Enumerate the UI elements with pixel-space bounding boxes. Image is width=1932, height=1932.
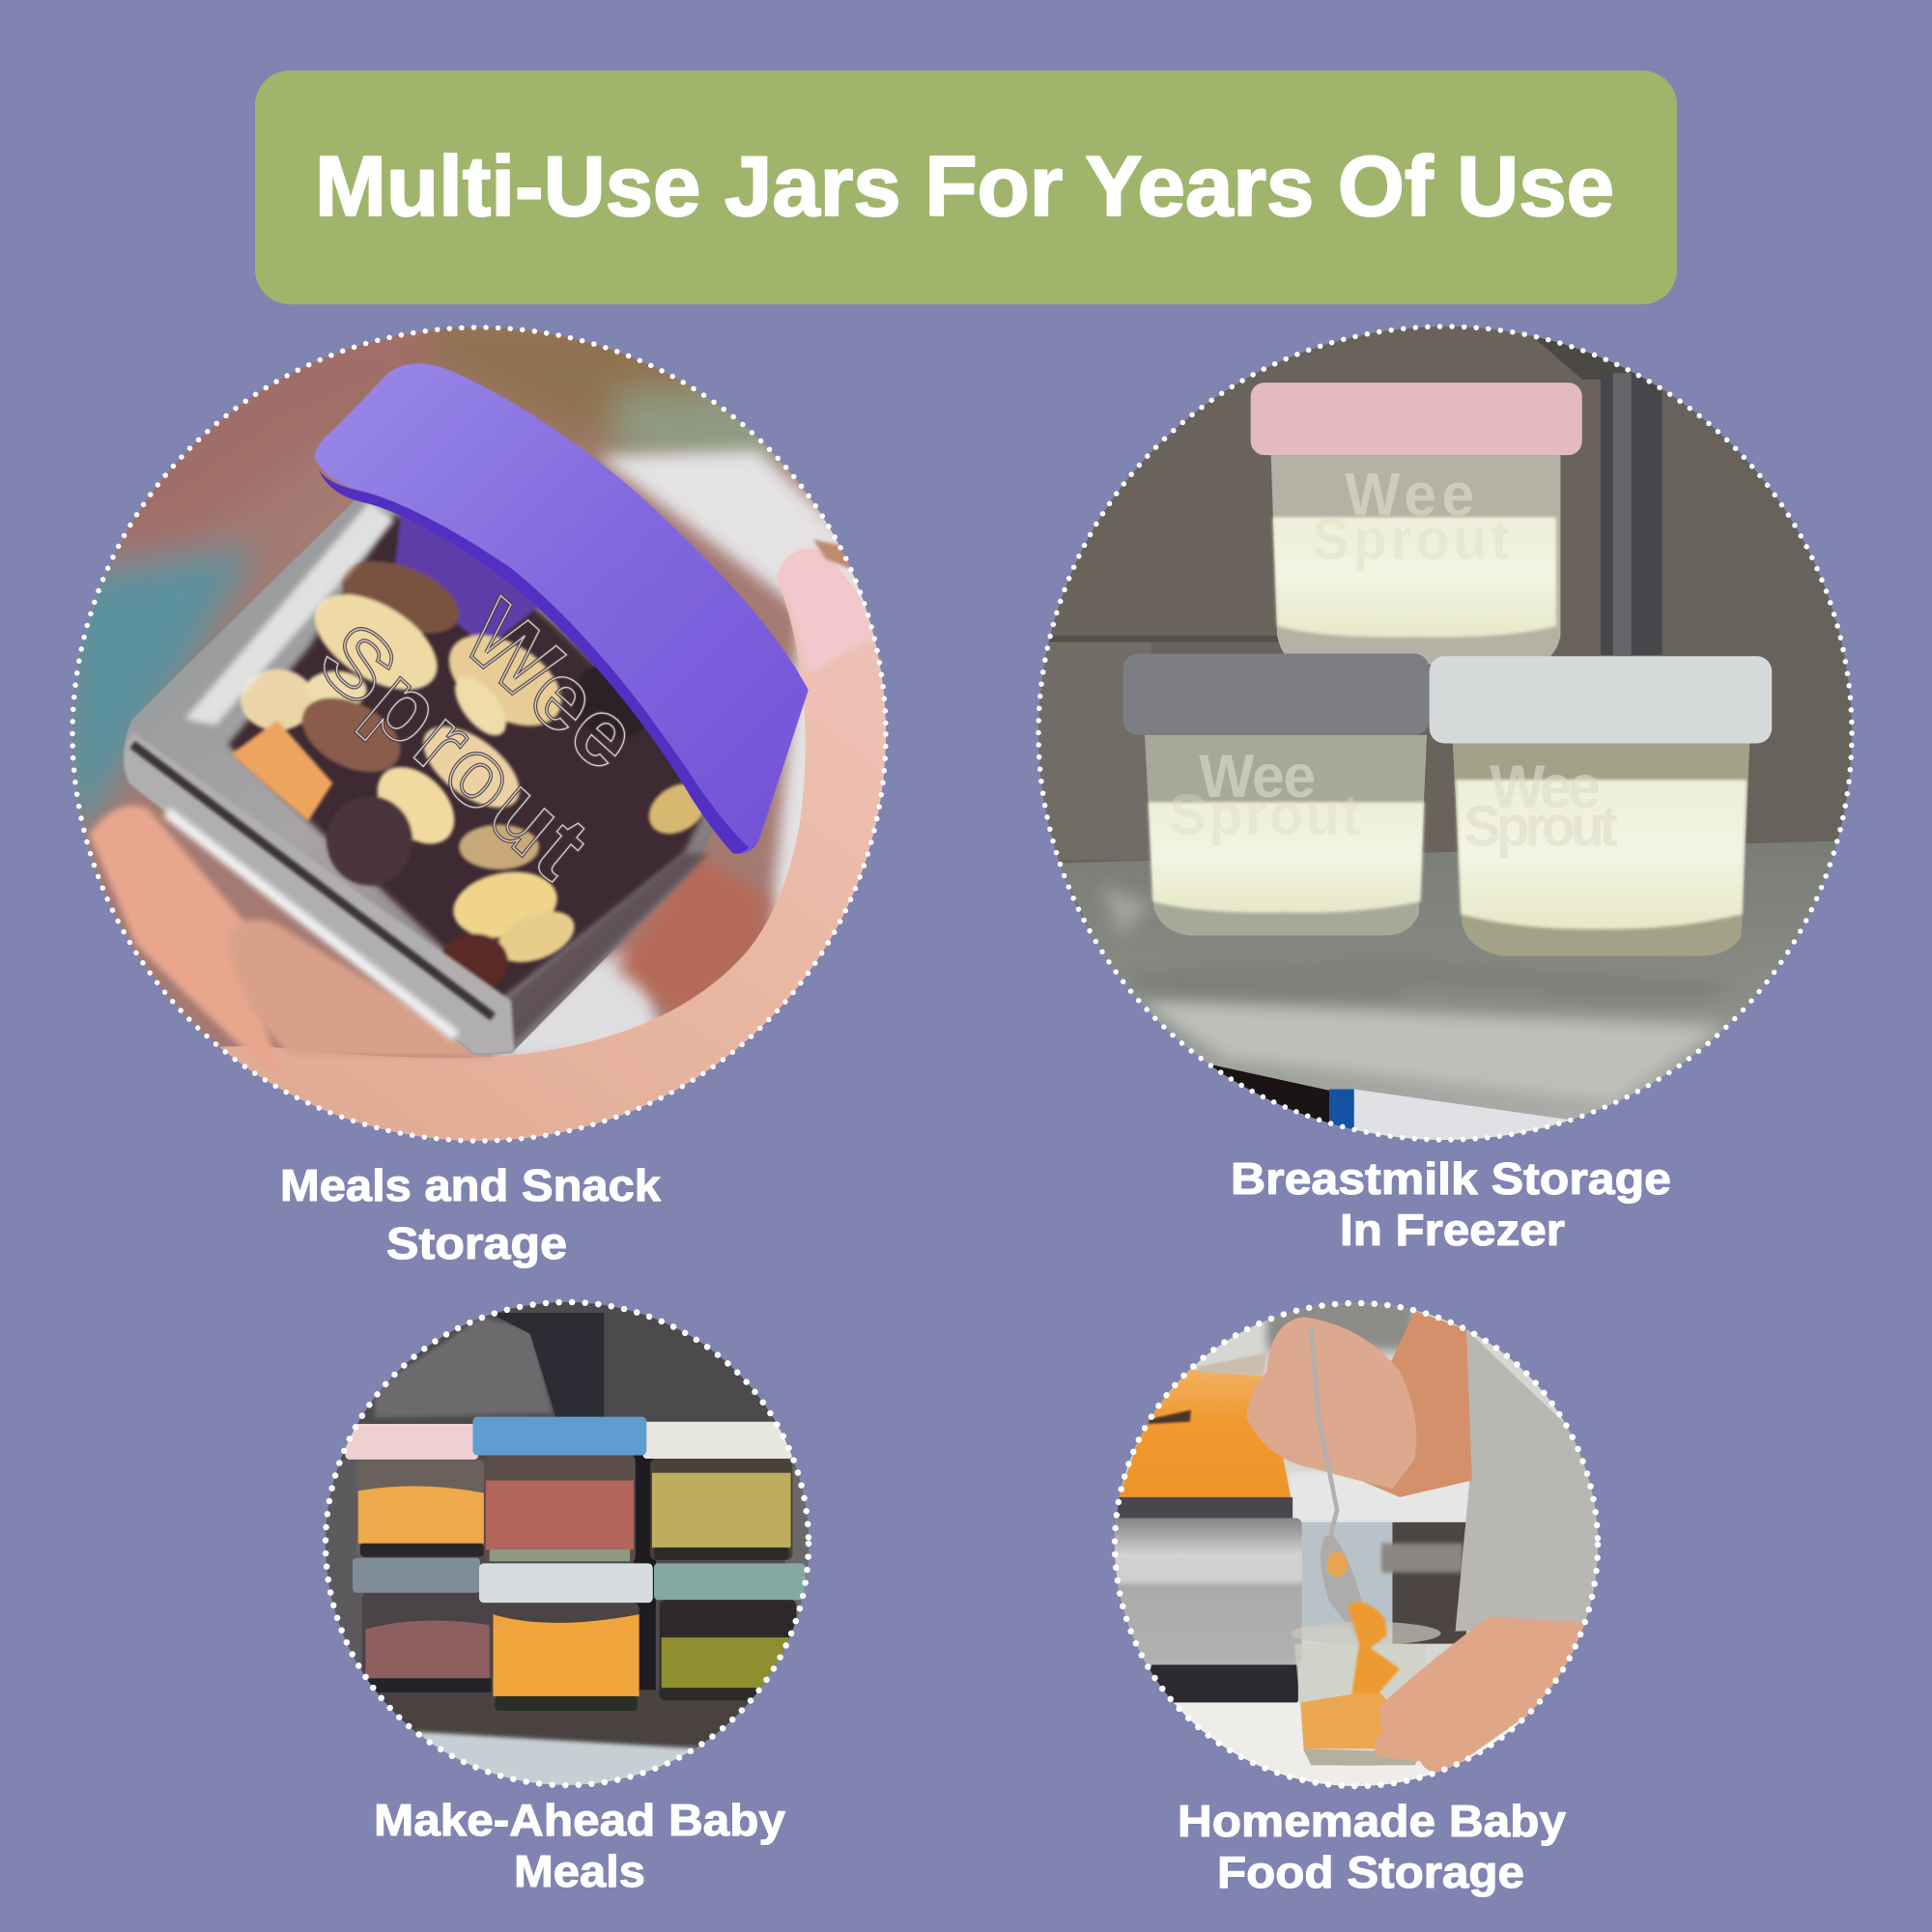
sweater bbox=[1456, 1329, 1606, 1632]
upper hand bbox=[1246, 1317, 1416, 1489]
dotted ring bbox=[1038, 327, 1852, 1140]
caption: In Freezer bbox=[1340, 1205, 1565, 1255]
fingertip bbox=[778, 549, 875, 674]
shelf bbox=[364, 1690, 771, 1745]
panel: make-ahead baby meals bbox=[320, 1296, 814, 1896]
photo: hand holding jar of snacks bbox=[62, 316, 899, 1154]
bottom-left jar bbox=[353, 1558, 493, 1692]
embossed highlight: Wee bbox=[446, 580, 659, 792]
caption bbox=[374, 1795, 785, 1896]
counter bbox=[1174, 1702, 1538, 1786]
shelf bbox=[1059, 840, 1865, 1154]
purple lid bbox=[314, 363, 809, 854]
top-middle jar bbox=[472, 1417, 646, 1562]
title: Multi-Use Jars For Years Of Use bbox=[315, 138, 1614, 234]
photo: six jars of puree bbox=[320, 1296, 814, 1795]
caption: Make-Ahead Baby bbox=[374, 1795, 785, 1845]
bottom-right jar bbox=[654, 1563, 806, 1700]
top jar bbox=[1251, 383, 1582, 665]
caption: Food Storage bbox=[1217, 1847, 1524, 1897]
small jar bbox=[1294, 1644, 1426, 1766]
panel: meals and snack storage bbox=[62, 316, 899, 1268]
caption: Storage bbox=[386, 1218, 567, 1268]
caption: Homemade Baby bbox=[1178, 1796, 1566, 1846]
caption: Meals and Snack bbox=[280, 1160, 661, 1210]
panel: breastmilk storage bbox=[1028, 316, 1865, 1255]
dotted ring bbox=[72, 327, 886, 1141]
top-left jar bbox=[345, 1424, 484, 1556]
left jar bbox=[1123, 654, 1430, 935]
embossed brand on jar: Sprout bbox=[301, 603, 611, 901]
lower hand bbox=[1375, 1616, 1588, 1774]
photo: spooning puree into jar bbox=[1108, 1296, 1606, 1795]
blender jar bbox=[1119, 1370, 1291, 1497]
jar contents bbox=[228, 514, 708, 1001]
lid underside bbox=[319, 470, 749, 854]
jar base bbox=[124, 732, 515, 1055]
hand bbox=[219, 549, 886, 1141]
photo: three stacked jars of milk bbox=[1028, 316, 1865, 1154]
right jar: Sprout bbox=[1463, 795, 1618, 859]
right jar: Wee bbox=[1490, 753, 1601, 821]
caption: Meals bbox=[514, 1846, 645, 1896]
jar body bbox=[124, 492, 721, 1055]
caption bbox=[1231, 1153, 1671, 1255]
top jar: Wee bbox=[1345, 461, 1474, 529]
top jar: Sprout bbox=[1312, 508, 1510, 572]
title banner bbox=[255, 71, 1677, 304]
spoon bbox=[1311, 1327, 1337, 1539]
caption: Breastmilk Storage bbox=[1231, 1153, 1671, 1204]
dotted ring bbox=[1115, 1303, 1598, 1786]
dotted ring bbox=[326, 1302, 809, 1785]
bottom-middle jar bbox=[479, 1563, 653, 1711]
right jar bbox=[1430, 656, 1772, 956]
fingers behind jar bbox=[616, 854, 770, 1020]
embossed highlight: Sprout bbox=[301, 603, 611, 901]
glass highlights bbox=[185, 501, 394, 725]
left jar: Wee bbox=[1199, 743, 1316, 810]
caption bbox=[1178, 1796, 1566, 1897]
top-right jar bbox=[642, 1422, 792, 1560]
blender base bbox=[1117, 1497, 1293, 1519]
embossed brand on jar: Wee bbox=[446, 580, 659, 792]
left jar: Sprout bbox=[1169, 783, 1360, 847]
caption bbox=[280, 1160, 661, 1268]
panel: homemade baby food storage bbox=[1108, 1296, 1606, 1897]
forearm bbox=[1362, 1312, 1472, 1497]
